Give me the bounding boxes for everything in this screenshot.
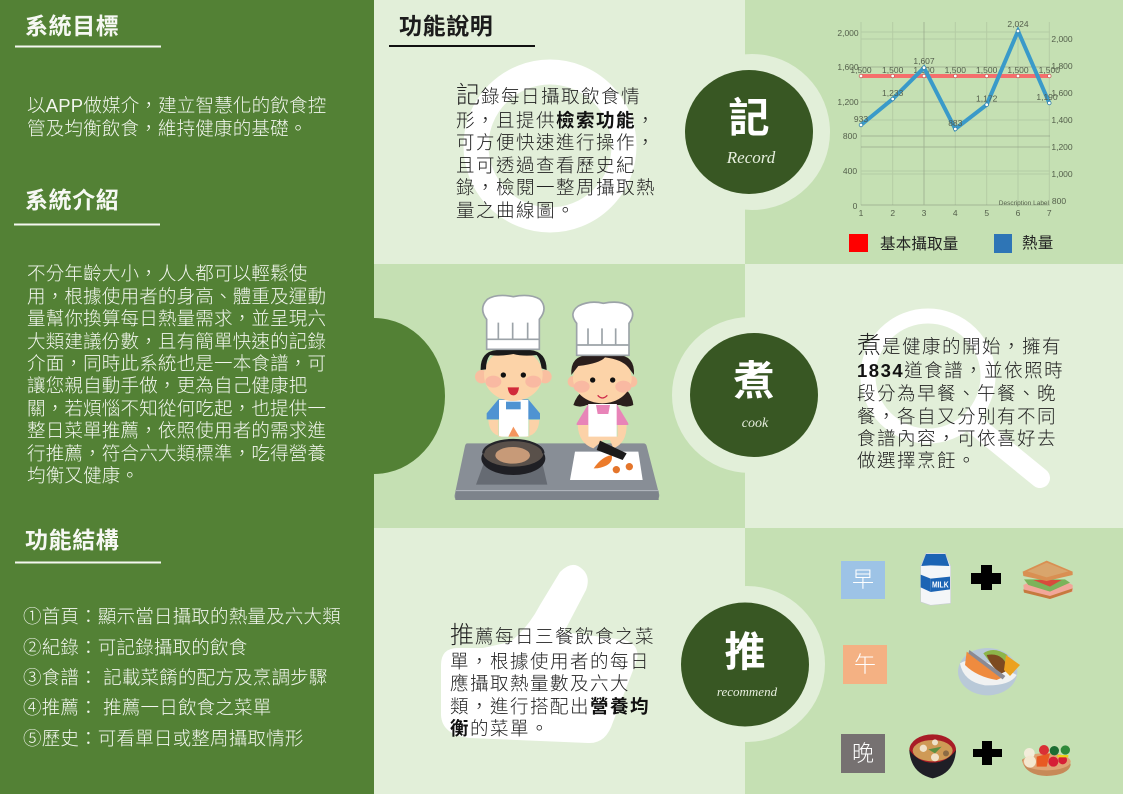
chart right axis: 1,200 [1051,142,1073,152]
text block: goal: 以APP做媒介，建立智慧化的飲食控 [27,95,326,116]
series: calories: 933 [854,114,868,124]
chart legend: 熱量 [1022,234,1053,252]
heading: 系統介紹: 系統介紹 [25,187,119,213]
heading: 功能結構: 功能結構 [25,527,119,553]
text block: introduction: 整日菜單推薦，依照使用者的需求進 [27,420,326,441]
text block: goal: 管及均衡飲食，維持健康的基礎。 [27,118,308,139]
text block: cook description: 1834道食譜，並依照時 [857,360,1064,381]
series: basic intake: 1,500 [882,65,904,75]
text block: introduction [27,263,326,486]
pan [481,442,545,475]
text block: feature list: ⑤歷史：可看單日或整周攝取情形 [23,728,304,749]
series: calories [854,19,1058,131]
cutting board [570,452,643,480]
text block: recommend description: 類，進行搭配出營養均 [450,696,650,717]
chart x axis: 5 [984,208,989,218]
series: basic intake: 1,500 [945,65,966,75]
text block: goal [27,95,326,139]
chart left axis [837,28,859,211]
badge: 煮 cook: cook [742,416,769,431]
chart x axis: 4 [953,208,958,218]
series: calories: 1,607 [913,56,935,66]
chart legend [849,234,1053,253]
heading: 功能說明: 功能說明 [399,13,493,39]
meal: dinner [841,734,885,773]
text block: feature list: ①首頁：顯示當日攝取的熱量及六大類 [23,606,341,627]
panel: left sidebar [0,0,374,794]
icon: vegetable bento [1022,745,1071,776]
series: basic intake: 1,500 [1039,65,1060,75]
text block: record description [456,82,656,221]
chart right axis: 1,800 [1051,61,1073,71]
chart right axis: 1,600 [1051,88,1073,98]
icon: white ring watermark [476,72,624,220]
badge: 記 Record: 記 [728,95,770,141]
icon: magnifier watermark [868,316,1040,478]
chart right axis [1051,34,1073,206]
text block: record description: 錄，檢閱一整周攝取熱 [456,177,656,198]
text block: introduction: 行推薦，符合六大類標準，吃得營養 [27,443,326,464]
text block: record description: 記錄每日攝取飲食情 [456,82,641,109]
badge: 推 recommend: recommend [717,684,778,699]
series: calories: 1,190 [1036,92,1058,102]
text block: recommend description: 推薦每日三餐飲食之菜 [450,622,655,649]
chart left axis: 400 [843,166,857,176]
chart x axis: 6 [1016,208,1021,218]
series: calories: 2,024 [1007,19,1029,29]
chart left axis: 0 [853,201,858,211]
badge: 記 Record: Record [726,148,776,167]
chart legend: 基本攝取量 [880,234,959,253]
chart right axis: 800 [1052,196,1066,206]
badge: 推 recommend: 推 [724,629,766,675]
girl [573,390,633,407]
text block: introduction: 大類建議份數，且有簡單快速的記錄 [27,331,326,352]
text block: cook description: 做選擇烹飪。 [857,450,977,471]
badge: 煮 cook: 煮 [734,358,774,404]
icon: milk carton: MILK [932,580,949,589]
text block: recommend description: 應攝取熱量數及六大 [450,673,630,694]
meal: lunch: 午 [854,652,876,677]
chart x axis [859,200,1052,218]
chart x axis: Description Label [999,200,1050,207]
text block: cook description: 煮是健康的開始，擁有 [857,332,1062,359]
icon: milk carton [921,553,951,605]
text block: recommend description [450,622,655,739]
series: basic intake: 1,500 [976,65,998,75]
text block: cook description: 段分為早餐、午餐、晚 [857,383,1057,404]
series: basic intake: 1,500 [850,65,872,75]
text block: introduction: 用，根據使用者的身高、體重及運動 [27,286,326,307]
chart right axis: 2,000 [1051,34,1073,44]
heading: 系統目標: 系統目標 [25,13,119,39]
text block: record description: 形，且提供檢索功能， [456,110,656,131]
chart x axis: 3 [922,208,927,218]
chart right axis: 1,400 [1051,115,1073,125]
chart left axis: 1,200 [837,97,859,107]
text block: introduction: 量幫你換算每日熱量需求，並呈現六 [27,308,326,329]
icon: sandwich [1023,561,1073,599]
background panels [374,0,1123,794]
meal: lunch [843,645,887,684]
badge: 煮 cook [672,317,828,473]
line chart: calories [837,19,1073,218]
meal: dinner: 晚 [852,741,874,766]
text block: introduction: 均衡又健康。 [27,465,139,486]
text block: feature list [23,606,341,749]
text block: recommend description: 單，根據使用者的每日 [450,651,650,672]
half circle tab [374,318,445,474]
text block: introduction: 介面，同時此系統也是一本食譜，可 [27,353,326,374]
text block: introduction: 關，若煩惱不知從何吃起，也提供一 [27,398,326,419]
text block: record description: 且可透過查看歷史紀 [456,155,636,176]
icon: plus breakfast [971,565,1001,590]
text block: cook description: 餐，各自又分別有不同 [857,406,1057,427]
text block: record description: 可方便快速進行操作， [456,132,656,153]
meal: breakfast [841,561,885,599]
chart x axis: 2 [890,208,895,218]
chart x axis: 7 [1047,208,1052,218]
text block: feature list: ②紀錄：可記錄攝取的飲食 [23,637,247,658]
chart x axis: 1 [859,208,864,218]
series: basic intake [850,65,1060,78]
text block: recommend description: 衡的菜單。 [450,718,550,739]
series: basic intake: 1,500 [1007,65,1029,75]
illustration: two children cooking [455,295,659,500]
text block: cook description [857,332,1064,471]
meal: breakfast: 早 [852,567,874,592]
icon: thumbs up watermark [441,565,638,743]
icon: salmon rice bowl [958,648,1020,695]
chart right axis: 1,000 [1051,169,1073,179]
text block: introduction: 不分年齡大小，人人都可以輕鬆使 [27,263,308,284]
icon: miso soup bowl [909,734,956,778]
series: calories: 1,233 [882,88,904,98]
chart left axis: 1,600 [837,62,859,72]
badge: 推 recommend [669,586,825,742]
series: calories: 1,172 [976,94,998,104]
chart left axis: 2,000 [837,28,859,38]
badge: 記 Record [674,54,830,210]
series: calories: 883 [948,118,963,128]
text block: cook description: 食譜內容，可依喜好去 [857,428,1057,449]
text block: feature list: ③食譜： 記載菜餚的配方及烹調步驟 [23,667,328,688]
counter [455,443,659,500]
text block: introduction: 讓您親自動手做，更為自己健康把 [27,375,308,396]
text block: record description: 量之曲線圖。 [456,200,576,221]
icon: plus dinner [973,741,1002,765]
series: basic intake: 1,500 [913,65,935,75]
text block: feature list: ④推薦： 推薦一日飲食之菜單 [23,697,271,718]
chart left axis: 800 [843,131,857,141]
boy [487,399,540,419]
